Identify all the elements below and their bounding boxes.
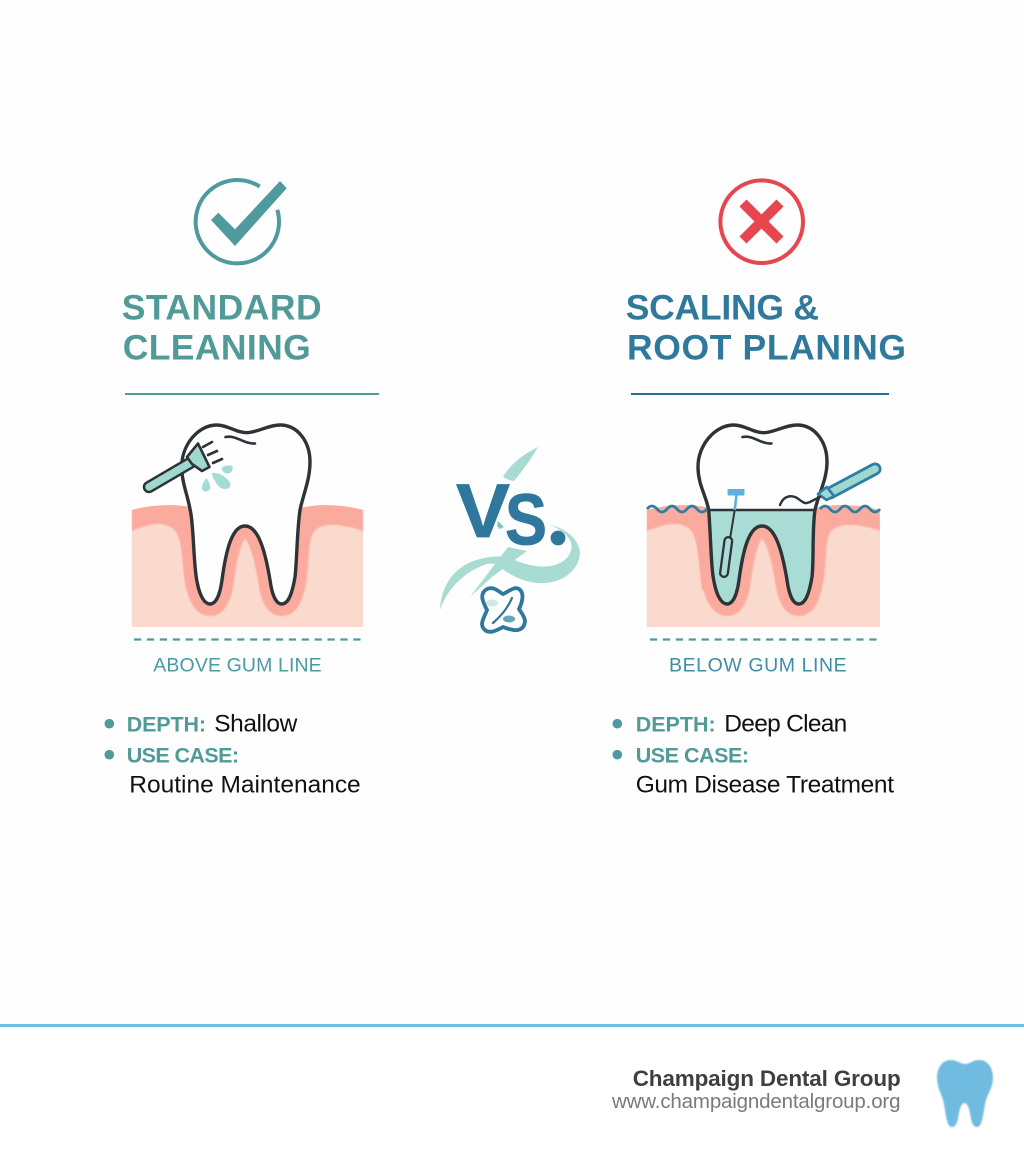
website: www.champaigndentalgroup.org <box>611 1090 900 1113</box>
gum <box>646 500 881 628</box>
heading: standard cleaning: STANDARD <box>122 288 322 328</box>
icon: accent between letters <box>497 521 504 529</box>
icon: x in circle <box>720 180 803 263</box>
list: scaling details: Gum Disease Treatment <box>636 772 894 799</box>
list: standard cleaning details: Shallow <box>214 711 298 738</box>
gum <box>131 500 364 628</box>
icon: water droplets <box>202 465 233 492</box>
heading: standard cleaning: CLEANING <box>123 328 311 368</box>
brand name: Champaign Dental Group <box>633 1066 901 1091</box>
footer <box>0 1024 1024 1154</box>
gum line dashes <box>134 638 363 641</box>
heading: scaling and root planing <box>626 288 906 368</box>
illustration: tooth below gum line <box>646 425 881 628</box>
icon: cleaning brush <box>149 442 222 487</box>
list: scaling details: DEPTH: <box>636 713 716 737</box>
swoosh <box>440 447 580 610</box>
list: standard cleaning details <box>104 711 361 799</box>
illustration: tooth above gum line <box>131 425 364 628</box>
panel: scaling and root planing <box>612 180 906 799</box>
icon: bacteria <box>482 588 525 632</box>
tooth outline <box>698 425 827 604</box>
label: below gum line: BELOW GUM LINE <box>669 655 847 677</box>
title: vs <box>456 469 565 560</box>
list: scaling details <box>612 711 894 799</box>
icon: check mark in circle <box>196 180 287 263</box>
heading: scaling and root planing: ROOT PLANING <box>627 328 906 368</box>
gum line dashes <box>650 638 880 641</box>
heading: standard cleaning <box>122 288 322 368</box>
heading: scaling and root planing: SCALING & <box>626 288 819 328</box>
list: scaling details: Deep Clean <box>724 711 847 738</box>
list: standard cleaning details: Routine Maintenance <box>129 772 361 799</box>
panel: versus <box>440 447 580 632</box>
list: standard cleaning details: USE CASE: <box>127 743 239 767</box>
tooth fill <box>698 425 827 604</box>
label: above gum line: ABOVE GUM LINE <box>153 655 322 677</box>
tooth outline <box>182 425 310 604</box>
icon: scaler <box>780 469 875 505</box>
icon: tooth logo <box>937 1060 993 1127</box>
panel: standard cleaning <box>104 180 379 799</box>
root cleaned area <box>710 511 814 602</box>
list: standard cleaning details: DEPTH: <box>127 713 206 737</box>
title: vs: S <box>505 480 547 560</box>
title: vs: . <box>551 500 565 553</box>
list: scaling details: USE CASE: <box>636 743 749 767</box>
icon: probe <box>724 489 744 573</box>
gum waves <box>647 506 880 512</box>
title: vs: V <box>456 469 510 554</box>
